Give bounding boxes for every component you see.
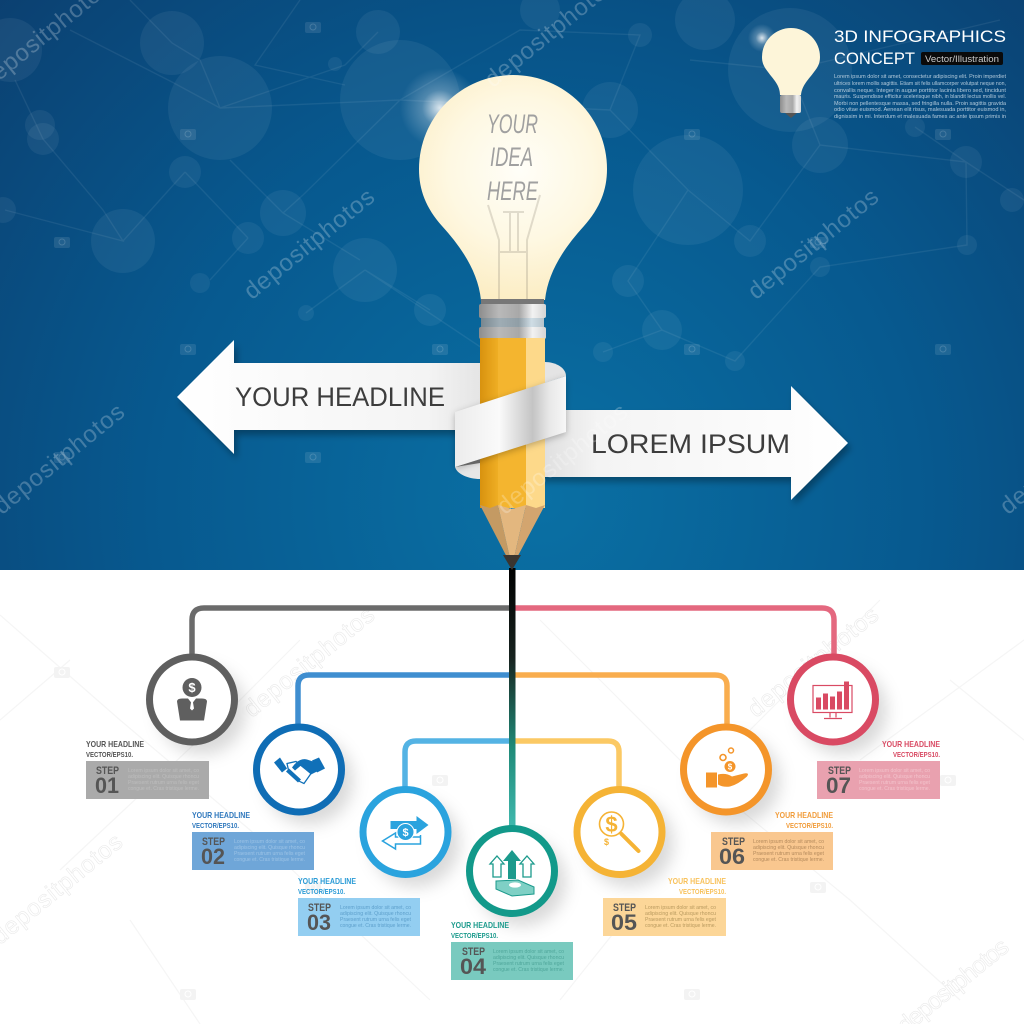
icon: magnifier over dollar — [600, 812, 638, 851]
step 1 label: STEP — [96, 765, 119, 777]
step 3 label: STEP — [308, 902, 331, 914]
step 3 label: 03 — [307, 910, 331, 935]
icon: handshake — [274, 758, 325, 784]
icon: money exchange arrows: $ — [402, 827, 409, 839]
arrow text: LOREM IPSUM: LOREM IPSUM — [591, 429, 790, 459]
step 5 body — [645, 905, 717, 929]
step 6 label — [711, 810, 833, 870]
step 6 body: Lorem ipsum dolor sit amet, co — [753, 839, 824, 845]
step 5 label: 05 — [611, 910, 637, 935]
step 5 headline: YOUR HEADLINE — [668, 876, 726, 886]
icon: monitor with bar chart — [813, 682, 852, 718]
step 6 body — [753, 839, 825, 863]
step 4 headline: YOUR HEADLINE — [451, 920, 509, 930]
title body text: Morbi non pellentesque massa, sed fringilla nulla. Proin sagittis gravida — [834, 101, 1006, 107]
connector: step 7 pink line — [512, 608, 834, 660]
step 1 headline: VECTOR/EPS10. — [86, 752, 133, 759]
small light bulb icon — [748, 24, 820, 118]
step 5 body: Praesent rutrum urna felis eget — [645, 917, 717, 923]
step 4 label: STEP — [462, 946, 485, 958]
step 2 body — [234, 839, 306, 863]
step 5 label — [603, 876, 726, 936]
panel: blue background — [0, 0, 1024, 570]
step 5 label: STEP — [613, 902, 636, 914]
step 7 body: Lorem ipsum dolor sit amet, co — [859, 768, 930, 774]
icon: hand with coins: $ — [728, 762, 733, 772]
step 3 body: Praesent rutrum urna felis eget — [340, 917, 412, 923]
step 4 label — [451, 920, 573, 980]
badge: Vector/Illustration: Vector/Illustration — [925, 54, 999, 64]
ribbon wrapping pencil — [455, 362, 566, 479]
bulb text: YOUR IDEA HERE: YOUR — [487, 109, 538, 139]
step 7 body: adipiscing elit. Quisque rhoncu — [859, 774, 930, 780]
step 2 body: congue et. Cras tristique lerme. — [234, 857, 305, 863]
bulb glow — [400, 68, 480, 148]
step 2 ring and icon — [256, 727, 353, 824]
pencil tip — [480, 505, 545, 570]
step 3 body: congue et. Cras tristique lerme. — [340, 923, 411, 929]
step 6 body: congue et. Cras tristique lerme. — [753, 857, 824, 863]
bulb text: YOUR IDEA HERE: IDEA — [490, 142, 533, 172]
icon: magnifier over dollar: $ — [604, 837, 609, 847]
step 6 label: 06 — [719, 844, 745, 869]
step 2 label: 02 — [201, 844, 225, 869]
connector: step 1 grey line — [192, 608, 512, 660]
badge: Vector/Illustration — [921, 52, 1003, 65]
pencil body — [480, 338, 545, 508]
icon: growth arrows over money — [490, 850, 534, 896]
step 4 headline — [451, 920, 509, 940]
step 6 body: adipiscing elit. Quisque rhoncu — [753, 845, 824, 851]
step 7 label: STEP — [828, 765, 851, 777]
step 4 ring and icon — [470, 828, 566, 926]
step 6 headline: YOUR HEADLINE — [775, 810, 833, 820]
step 2 headline — [192, 810, 250, 830]
step 7 headline: VECTOR/EPS10. — [893, 752, 940, 759]
step 4 body: congue et. Cras tristique lerme. — [493, 967, 564, 973]
bulb text: YOUR IDEA HERE: HERE — [487, 176, 539, 206]
step 1 body: Praesent rutrum urna felis eget — [128, 780, 200, 786]
step 3 body: Lorem ipsum dolor sit amet, co — [340, 905, 411, 911]
arrow: left pointing YOUR HEADLINE — [177, 340, 493, 459]
step 2 body: Praesent rutrum urna felis eget — [234, 851, 306, 857]
step 6 headline — [775, 810, 833, 830]
connector: central trunk line — [509, 568, 516, 830]
pencil with light bulb — [400, 68, 607, 570]
title body text: mauris. Suspendisse efficitur scelerisque nibh, in blandit lectus mollis vel. — [834, 94, 1006, 100]
title body text: dignissim in mi. Interdum et malesuada fames ac ante ipsum primis in — [834, 114, 1006, 120]
bulb filament — [488, 195, 540, 300]
step 6 headline: VECTOR/EPS10. — [786, 823, 833, 830]
step 7 body: Praesent rutrum urna felis eget — [859, 780, 931, 786]
step 7 label — [817, 739, 940, 799]
connector: step 3 light blue line — [405, 741, 512, 792]
step 7 headline — [882, 739, 940, 759]
title body text: odio vitae euismod. Aenean elit risus, malesuada porttitor euismod in, — [834, 107, 1007, 113]
watermarks on blue: depositphotos — [743, 183, 884, 305]
connector: step 5 yellow line — [512, 741, 619, 792]
watermarks on blue: depositphotos — [239, 183, 380, 305]
step 1 label: 01 — [95, 773, 119, 798]
connector: step 6 orange line — [512, 675, 727, 730]
step 7 body: congue et. Cras tristique lerme. — [859, 786, 930, 792]
step 1 headline — [86, 739, 144, 759]
step 3 headline — [298, 876, 356, 896]
step 5 body: Lorem ipsum dolor sit amet, co — [645, 905, 716, 911]
step 4 label: 04 — [460, 954, 487, 979]
title body text — [834, 74, 1007, 120]
step 2 headline: YOUR HEADLINE — [192, 810, 250, 820]
step 3 ring and icon — [363, 790, 460, 887]
step 5 headline: VECTOR/EPS10. — [679, 889, 726, 896]
arrow text: YOUR HEADLINE: YOUR HEADLINE — [235, 382, 445, 412]
panel: white lower background — [0, 570, 1024, 1024]
step 6 label: STEP — [722, 836, 745, 848]
step 4 body: adipiscing elit. Quisque rhoncu — [493, 955, 564, 961]
step 1 ring and icon — [150, 657, 246, 754]
step 6 body: Praesent rutrum urna felis eget — [753, 851, 825, 857]
light bulb glass — [419, 75, 607, 300]
step 3 body — [340, 905, 412, 929]
step 5 body: congue et. Cras tristique lerme. — [645, 923, 716, 929]
step 2 body: adipiscing elit. Quisque rhoncu — [234, 845, 305, 851]
title block: 3D infographics concept — [834, 27, 1007, 120]
watermarks on blue — [0, 0, 1024, 520]
step 4 headline: VECTOR/EPS10. — [451, 933, 498, 940]
icon: magnifier over dollar: $ — [605, 812, 618, 837]
step 3 body: adipiscing elit. Quisque rhoncu — [340, 911, 411, 917]
step 3 headline: YOUR HEADLINE — [298, 876, 356, 886]
title body text: ultrices lorem mollis sagittis. Etiam sit felis ullamcorper volutpat neque non, — [834, 81, 1006, 87]
connector: step 2 blue line — [298, 675, 512, 730]
step 1 body: adipiscing elit. Quisque rhoncu — [128, 774, 199, 780]
step 2 label — [192, 810, 314, 870]
step 3 label — [298, 876, 420, 936]
title block: 3D infographics concept: 3D INFOGRAPHICS — [834, 27, 1006, 46]
step 7 headline: YOUR HEADLINE — [882, 739, 940, 749]
bulb text: YOUR IDEA HERE — [487, 109, 539, 206]
network background pattern — [0, 0, 1024, 463]
watermarks on white: depositphotos — [239, 601, 380, 723]
step 4 body: Lorem ipsum dolor sit amet, co — [493, 949, 564, 955]
step 5 headline — [668, 876, 726, 896]
step 4 body — [493, 949, 565, 973]
pencil ferrule — [479, 299, 546, 339]
title body text: Lorem ipsum dolor sit amet, consectetur adipiscing elit. Proin imperdiet — [834, 74, 1007, 80]
watermarks on white — [0, 601, 1014, 1024]
watermarks on white: depositphotos — [743, 601, 884, 723]
step 1 body: congue et. Cras tristique lerme. — [128, 786, 199, 792]
step 5 body: adipiscing elit. Quisque rhoncu — [645, 911, 716, 917]
title block: 3D infographics concept: CONCEPT — [834, 49, 915, 68]
step 1 headline: YOUR HEADLINE — [86, 739, 144, 749]
step 4 body: Praesent rutrum urna felis eget — [493, 961, 565, 967]
step 6 ring and icon — [684, 727, 780, 824]
icon: businessman with dollar head: $ — [188, 680, 196, 695]
step 2 label: STEP — [202, 836, 225, 848]
step 7 body — [859, 768, 931, 792]
step 2 body: Lorem ipsum dolor sit amet, co — [234, 839, 305, 845]
step 1 body: Lorem ipsum dolor sit amet, co — [128, 768, 199, 774]
arrow: right pointing LOREM IPSUM — [535, 386, 851, 505]
step 1 label — [86, 739, 209, 799]
watermarks on blue: depositphotos — [492, 398, 633, 520]
step 2 headline: VECTOR/EPS10. — [192, 823, 239, 830]
title body text: convallis neque. Integer in augue porttitor lacinia libero sed, tincidunt — [834, 88, 1007, 94]
step 3 headline: VECTOR/EPS10. — [298, 889, 345, 896]
step 1 body — [128, 768, 200, 792]
step 7 ring and icon — [790, 657, 887, 754]
step 7 label: 07 — [826, 773, 851, 798]
step 5 ring and icon — [577, 790, 674, 887]
